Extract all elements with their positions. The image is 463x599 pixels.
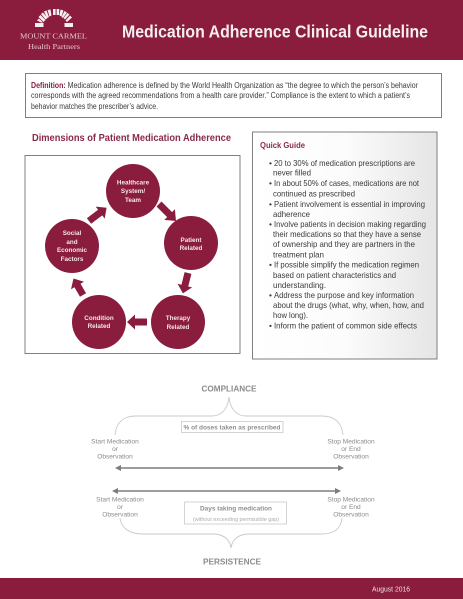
- circle: therapy related: Therapy: [166, 315, 191, 322]
- quick guide bullets: treatment plan: [273, 250, 324, 260]
- start label: Observation: [97, 454, 133, 460]
- circle: patient related: Patient: [180, 237, 202, 244]
- quick guide bullets: •: [269, 158, 272, 168]
- stop label: Observation: [333, 512, 369, 518]
- quick guide heading: Quick Guide: [260, 140, 305, 150]
- quick guide bullets: how long).: [273, 310, 308, 320]
- quick guide bullets: Patient involvement is essential in improving: [274, 199, 425, 209]
- quick guide bullets: •: [269, 199, 272, 209]
- circle: social and economic factors: Economic: [57, 247, 88, 254]
- persistence brace: [120, 518, 342, 548]
- title: Medication Adherence Clinical Guideline: [122, 22, 428, 42]
- logo: Mount Carmel Health Partners: [20, 9, 87, 51]
- arrow: patient to therapy: [176, 271, 195, 295]
- start label: [96, 496, 144, 518]
- compliance double arrow: [115, 465, 344, 471]
- start label: Start Medication: [96, 496, 144, 504]
- start label: or: [112, 446, 119, 453]
- arrow: therapy to condition: [127, 314, 147, 330]
- days box: Days taking medication: [200, 506, 272, 512]
- definition box: behavior matches the prescriber’s advice.: [31, 102, 158, 111]
- circle: patient related: [164, 216, 218, 270]
- panel: adherence cycle diagram: [25, 156, 240, 354]
- circle: healthcare system/team: System/: [121, 188, 145, 195]
- arrow: social to healthcare: [84, 202, 111, 227]
- quick guide bullets: based on patient characteristics and: [273, 270, 396, 280]
- quick guide bullets: •: [269, 290, 272, 300]
- stop label: Stop Medication: [327, 496, 375, 504]
- circle: condition related: Related: [88, 323, 111, 330]
- days box: (without exceeding permissible gap): [193, 517, 279, 523]
- quick guide bullets: Address the purpose and key information: [274, 290, 414, 300]
- quick guide bullets: •: [269, 320, 272, 330]
- circle: social and economic factors: [45, 219, 99, 273]
- circle: condition related: Condition: [84, 315, 114, 322]
- quick guide bullets: •: [269, 178, 272, 188]
- circle: condition related: [72, 295, 126, 349]
- circle: therapy related: [151, 295, 205, 349]
- start label: [91, 438, 139, 460]
- logo: Mount Carmel Health Partners: Health Partners: [28, 42, 80, 51]
- circle: therapy related: Related: [167, 324, 190, 331]
- persistence diagram: [96, 488, 375, 566]
- quick guide bullets: If possible simplify the medication regimen: [274, 260, 419, 270]
- heading: dimensions: Dimensions of Patient Medication Adherence: [32, 133, 231, 144]
- quick guide bullets: never filled: [273, 168, 311, 178]
- stop label: Observation: [333, 454, 369, 460]
- circle: social and economic factors: and: [66, 239, 78, 246]
- quick guide bullets: adherence: [273, 209, 310, 219]
- arrow: condition to social: [67, 275, 89, 299]
- start label: Observation: [102, 512, 138, 518]
- persistence double arrow: [112, 488, 341, 494]
- definition box: [26, 74, 442, 118]
- quick guide bullets: [269, 158, 426, 330]
- logo: Mount Carmel Health Partners: MOUNT CARMEL: [20, 32, 87, 40]
- quick guide bullets: In about 50% of cases, medications are not: [274, 178, 420, 188]
- start label: or: [117, 504, 124, 511]
- doses box: [182, 422, 283, 432]
- footer bar: [0, 578, 463, 599]
- quick guide bullets: continued as prescribed: [273, 188, 355, 198]
- persistence label: PERSISTENCE: [203, 556, 261, 566]
- quick guide bullets: Inform the patient of common side effects: [274, 320, 417, 330]
- quick guide bullets: about the drugs (what, why, when, how, and: [273, 300, 424, 310]
- stop label: Stop Medication: [327, 438, 375, 446]
- circle: healthcare system/team: [106, 164, 160, 218]
- definition box: corresponds with the agreed recommendations from a health care provider.” Compliance is the extent to which a patient’s: [31, 91, 410, 100]
- start label: Start Medication: [91, 438, 139, 446]
- quick guide bullets: understanding.: [273, 280, 326, 290]
- circle: healthcare system/team: Team: [125, 197, 141, 204]
- footer date: August 2016: [372, 584, 410, 594]
- compliance label: COMPLIANCE: [202, 384, 257, 394]
- quick guide bullets: their medications so that they have a sense: [273, 229, 421, 239]
- doses box: % of doses taken as prescribed: [184, 424, 280, 432]
- circle: patient related: Related: [180, 245, 203, 252]
- quick guide bullets: of ownership and they are partners in the: [273, 239, 415, 249]
- arrow: healthcare to patient: [154, 199, 181, 226]
- circle: social and economic factors: Factors: [61, 256, 84, 263]
- circle: social and economic factors: Social: [63, 230, 82, 237]
- stop label: [327, 496, 375, 518]
- days box: [184, 502, 286, 524]
- definition box: Definition: Medication adherence is defined by the World Health Organization as “the degree to which the person’s behavior: [31, 81, 418, 90]
- quick guide bullets: 20 to 30% of medication prescriptions are: [274, 158, 415, 168]
- compliance diagram: [91, 384, 375, 471]
- compliance brace: [115, 397, 343, 435]
- header banner: [0, 0, 463, 60]
- quick guide bullets: Involve patients in decision making regarding: [274, 219, 426, 229]
- circle: healthcare system/team: Healthcare: [117, 180, 150, 186]
- quick guide bullets: •: [269, 260, 272, 270]
- stop label: or End: [341, 504, 361, 511]
- quick guide bullets: •: [269, 219, 272, 229]
- panel: quick guide: [252, 132, 437, 359]
- stop label: [327, 438, 375, 460]
- stop label: or End: [341, 446, 361, 453]
